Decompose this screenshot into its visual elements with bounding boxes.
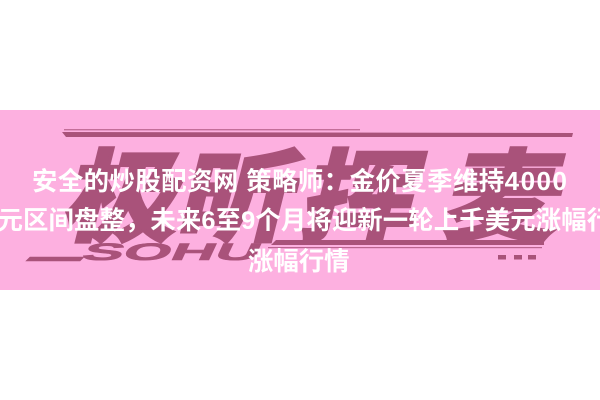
panel: pink banner [0, 110, 600, 290]
logo SOHU wordmark: SOHU [78, 238, 267, 265]
logo three dots [498, 255, 536, 260]
logo bottom bars [268, 240, 544, 248]
logo heading characters: 麦 [433, 118, 584, 262]
title line 3: 涨幅行情 [248, 248, 350, 276]
logo: Sohu watermark [25, 118, 584, 265]
logo heading characters: 挥 [291, 118, 442, 262]
logo heading characters: 极 [53, 118, 204, 262]
logo top bars [62, 129, 573, 137]
logo heading characters: 昕 [167, 118, 318, 262]
logo heading characters [53, 118, 584, 262]
title line 1: 安全的炒股配资网 策略师：金价夏季维持4000 [32, 166, 568, 196]
